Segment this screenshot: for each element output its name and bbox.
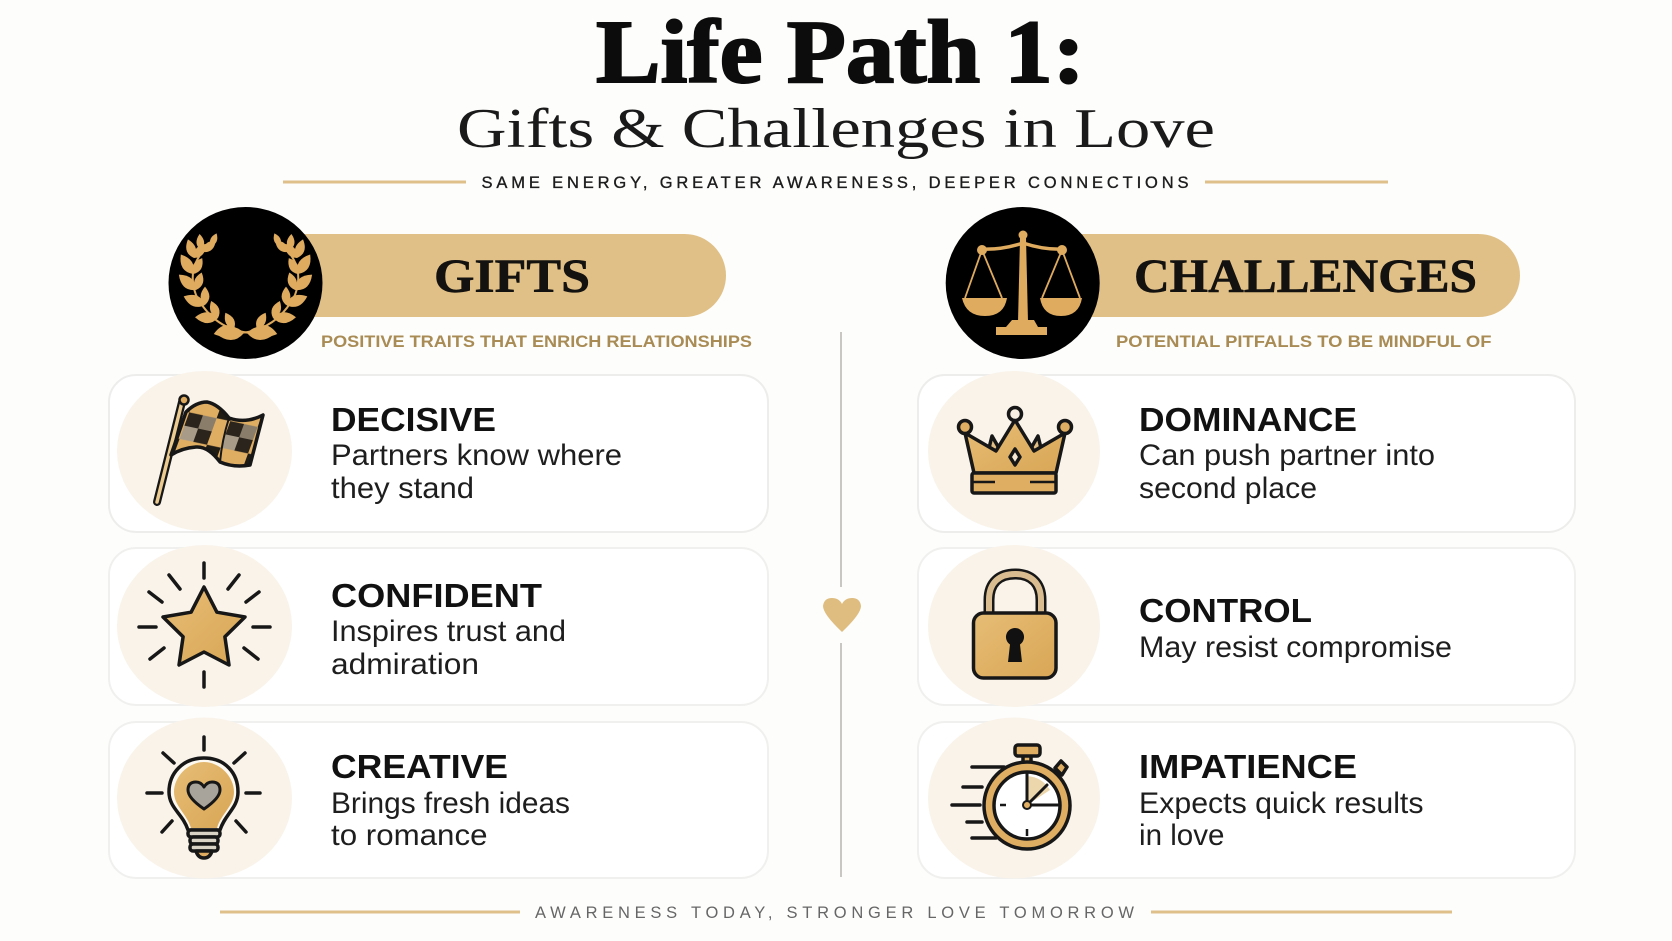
icon: stopwatch bbox=[952, 745, 1070, 849]
icon: crown bbox=[958, 408, 1072, 493]
icon: checkered flag bbox=[157, 396, 263, 502]
footer with rules bbox=[220, 904, 1452, 922]
text: dominance bbox=[1139, 401, 1435, 505]
text: confident: admiration bbox=[331, 648, 479, 681]
challenges caption: POTENTIAL PITFALLS TO BE MINDFUL OF bbox=[1116, 333, 1492, 351]
text: dominance: Can push partner into bbox=[1139, 439, 1435, 472]
gifts pill bbox=[245, 234, 726, 317]
gifts caption: POSITIVE TRAITS THAT ENRICH RELATIONSHIPS bbox=[321, 333, 752, 351]
icon: star with rays bbox=[139, 563, 270, 687]
icon: padlock bbox=[974, 574, 1056, 678]
text: impatience: in love bbox=[1139, 819, 1224, 852]
challenges pill bbox=[1023, 234, 1520, 317]
tagline with rules: SAME ENERGY, GREATER AWARENESS, DEEPER CONNECTIONS bbox=[482, 174, 1189, 192]
text: creative: to romance bbox=[331, 819, 488, 852]
text: control: CONTROL bbox=[1139, 592, 1312, 629]
text: decisive: they stand bbox=[331, 472, 474, 505]
panel: gifts header bbox=[168, 207, 752, 359]
text: control bbox=[1139, 592, 1452, 664]
subtitle: Gifts & Challenges in Love bbox=[457, 98, 1215, 160]
gifts heading: GIFTS bbox=[434, 250, 590, 303]
text: creative bbox=[331, 748, 570, 852]
text: confident: Inspires trust and bbox=[331, 615, 566, 648]
card: confident bbox=[109, 545, 768, 707]
icon: laurel wreath badge bbox=[168, 207, 322, 359]
card: control bbox=[918, 545, 1575, 707]
tagline with rules bbox=[283, 174, 1388, 192]
text: confident: CONFIDENT bbox=[331, 577, 542, 614]
card: creative bbox=[109, 718, 768, 878]
text: creative: CREATIVE bbox=[331, 748, 508, 785]
text: decisive: DECISIVE bbox=[331, 401, 496, 438]
center divider with heart bbox=[823, 332, 861, 877]
text: confident bbox=[331, 577, 566, 681]
text: decisive bbox=[331, 401, 622, 505]
card: impatience bbox=[918, 718, 1575, 878]
challenges heading: CHALLENGES bbox=[1134, 250, 1477, 303]
icon: light bulb with heart bbox=[147, 737, 260, 858]
text: decisive: Partners know where bbox=[331, 439, 622, 472]
card: decisive bbox=[109, 371, 768, 532]
panel: challenges header bbox=[946, 207, 1520, 359]
text: impatience bbox=[1139, 748, 1424, 852]
text: impatience: Expects quick results bbox=[1139, 787, 1424, 820]
text: impatience: IMPATIENCE bbox=[1139, 748, 1357, 785]
title: Life Path 1: bbox=[596, 3, 1085, 102]
card: dominance bbox=[918, 371, 1575, 532]
footer with rules: AWARENESS TODAY, STRONGER LOVE TOMORROW bbox=[535, 904, 1134, 922]
text: creative: Brings fresh ideas bbox=[331, 787, 570, 820]
text: dominance: DOMINANCE bbox=[1139, 401, 1357, 438]
text: dominance: second place bbox=[1139, 472, 1317, 505]
icon: scales badge bbox=[946, 207, 1100, 359]
text: control: May resist compromise bbox=[1139, 631, 1452, 664]
